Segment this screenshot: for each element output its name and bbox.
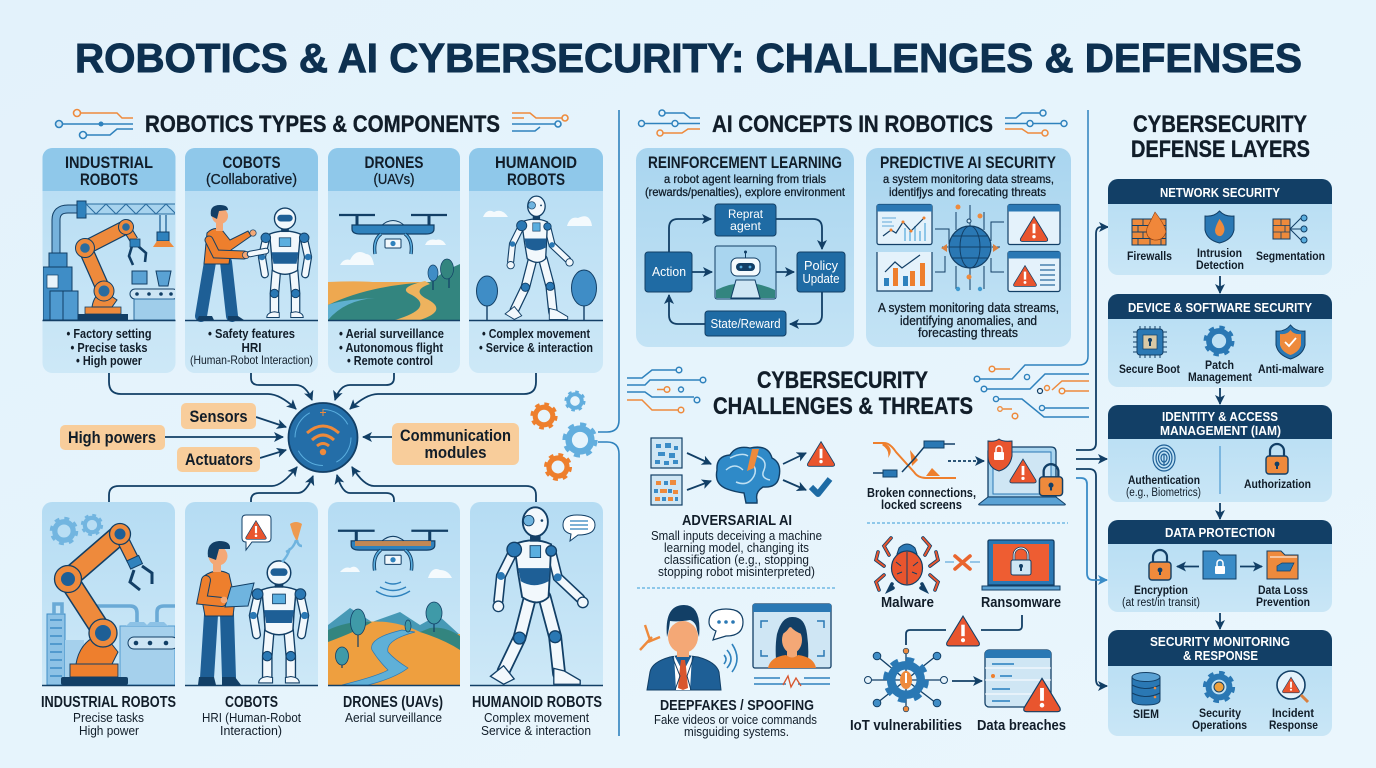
arrows between layers [1219,276,1221,629]
icon: operations gear [1205,673,1233,701]
label: communication modules [392,423,519,465]
description lower [878,301,1059,340]
caption: HRI (Human-Robot [202,710,301,725]
ground line [185,320,318,322]
heading: DEVICE & SOFTWARE SECURITY [1128,300,1312,315]
panel: reinforcement learning [636,148,854,347]
ground line [328,320,460,322]
icon: fingerprint [1153,445,1175,471]
label: Incident [1272,706,1314,720]
heading: & RESPONSE [1183,648,1258,663]
label: actuators [177,447,260,472]
bullet text: (Human-Robot Interaction) [190,353,313,367]
box: repeat agent [715,204,776,236]
icon: warning [807,442,835,466]
section: cybersecurity threats [627,110,1108,739]
panel: industrial robots [42,148,178,373]
arrow [952,680,982,682]
panel: cobots [185,148,318,373]
icon: gears [532,392,595,479]
chart window: bars [877,252,932,291]
description: Fake videos or voice commands [654,713,817,727]
heading: ROBOTS [507,170,565,189]
bullet text: • Autonomous flight [339,341,444,355]
icon: sound waves [724,644,737,672]
threat: broken connections [867,439,1065,512]
alert window 2 [1008,252,1060,292]
heading [495,153,577,189]
icon: blue folder [1203,551,1236,579]
threat: malware [876,538,1061,611]
labels: IoT vulnerabilities [850,718,962,734]
icon: circuit right with riser [974,110,1089,419]
label [867,485,976,512]
heading: IDENTITY & ACCESS [1162,409,1278,424]
labels: Data breaches [977,718,1066,734]
label [1122,583,1200,609]
panel: data protection [1108,520,1332,612]
description: learning model, changing its [664,541,809,555]
label: Broken connections, [867,485,976,500]
label: high powers [60,425,165,450]
bullet text: • Service & interaction [479,341,593,355]
label: Detection [1196,258,1244,272]
icon: orange spark [640,625,660,650]
label [1192,706,1247,732]
heading: SECURITY MONITORING [1150,634,1290,649]
panel: identity and access management [1108,405,1332,502]
icon: speech bubble [709,609,743,640]
label: Response [1269,718,1318,732]
labels [850,718,1066,734]
heading: DRONES [364,153,424,172]
box: policy update [797,252,845,292]
icon: database [1132,672,1160,705]
box: state reward: State/Reward [710,317,781,331]
ground line [470,684,603,686]
description: Small inputs deceiving a machine [651,529,822,543]
icon: broken cables [873,441,956,478]
bullet text: • Precise tasks [70,341,148,355]
heading: INDUSTRIAL [65,153,153,172]
label: communication modules: modules [424,443,486,462]
caption: INDUSTRIAL ROBOTS [41,694,176,711]
label: Prevention [1256,595,1310,609]
box: repeat agent: Reprat [728,207,764,221]
heading: ROBOTS [80,170,138,189]
bullet text: • Remote control [347,354,433,368]
panel: drones lower [328,502,460,725]
vertical section divider [598,110,619,736]
icon: suited person [647,605,721,690]
bullet text: • Safety features [208,327,295,341]
box: action: Action [652,265,686,279]
heading: COBOTS [222,153,280,172]
icon: patch gear [1206,328,1232,354]
illustration: drone over landscape [328,215,460,320]
label: (e.g., Biometrics) [1126,487,1201,499]
label: Management [1188,370,1252,384]
icon: orange folder [1267,551,1298,579]
icon: circuit left [56,110,133,138]
box: robot agent [715,246,776,299]
heading: defense layers [1131,111,1310,163]
hub: wifi core [288,403,358,472]
threat: IoT vulnerabilities [850,648,1066,734]
arrows [1177,566,1262,568]
heading: (UAVs) [374,171,414,188]
icon: ransomware laptop [982,540,1060,590]
caption [202,694,301,738]
box: action [645,252,692,292]
arrows [687,453,806,490]
heading [65,153,153,189]
label: Firewalls [1127,249,1172,263]
caption [472,694,602,738]
panel: industrial robots lower [41,502,178,738]
caption: Aerial surveillance [345,710,442,725]
illustration: person with tablet and robot [198,515,308,685]
panel: humanoid lower [470,502,603,738]
panel: network security [1108,179,1332,275]
label: Intrusion [1197,246,1242,260]
caption: COBOTS [225,694,278,711]
label: actuators: Actuators [185,451,253,469]
icon: check [811,479,830,494]
illustration: factory arm [43,201,178,320]
label: locked screens [881,497,962,512]
heading: AI concepts: AI CONCEPTS IN ROBOTICS [712,111,993,138]
icon: anti-malware shield [1276,325,1305,359]
title: ROBOTICS & AI CYBERSECURITY: CHALLENGES & DEFENSES [75,35,1302,81]
labels: Ransomware [981,595,1061,611]
label: Secure Boot [1119,362,1180,376]
label: SIEM [1133,707,1159,721]
description [654,713,817,739]
label: DEEPFAKES / SPOOFING [660,697,814,714]
heading: DATA PROTECTION [1165,525,1275,540]
chart window: line [877,204,932,244]
icon: cross [945,556,980,569]
input images [651,438,682,505]
description: misguiding systems. [684,725,789,739]
bullet text [339,327,444,368]
icon: circuit left [627,367,706,413]
heading: robotics types: ROBOTICS TYPES & COMPONENTS [145,111,500,138]
panel: device and software security [1108,294,1332,387]
divider [1219,446,1221,494]
alert window 1 [1008,204,1060,244]
box: policy update: Update [802,272,840,286]
box: repeat agent: agent [730,219,762,233]
bullet text: • Complex movement [482,327,591,341]
label: Operations [1192,718,1247,732]
heading: PREDICTIVE AI SECURITY [880,153,1057,172]
caption: Interaction) [220,723,282,738]
description: stopping robot misinterpreted) [658,565,815,579]
ground line [42,684,175,686]
threat: deepfakes and spoofing [640,604,831,739]
illustration: walking humanoid [476,196,596,320]
connectors to defense layers [1076,227,1108,686]
description lower: forecasting threats [918,326,1018,340]
labels: Malware [881,595,934,611]
panel: humanoid robots [469,148,603,373]
bullet text: • Factory setting [66,327,152,341]
icon: database window [985,650,1060,712]
threat: adversarial AI [651,438,835,579]
icon: firewall [1132,212,1166,245]
label [1269,706,1318,732]
icon: waveform [754,676,830,687]
label: ADVERSARIAL AI [682,512,792,529]
label: (at rest/in transit) [1122,597,1200,609]
label: Encryption [1134,583,1188,597]
dashed divider [867,522,1068,524]
icon: chip [1133,326,1167,358]
label: communication modules: Communication [400,426,511,445]
panel: security monitoring and response [1108,630,1332,736]
heading: challenges and threats: CYBERSECURITY [757,367,928,394]
description: classification (e.g., stopping [664,553,809,567]
bullet text [190,327,313,367]
description lower: A system monitoring data streams, [878,301,1059,315]
label: sensors: Sensors [190,408,248,426]
bullet text: • Aerial surveillance [339,327,444,341]
section: robotics types and components [41,110,603,738]
heading [1160,409,1281,438]
description [645,172,846,199]
label: Patch [1205,358,1234,372]
heading: HUMANOID [495,153,577,172]
label: sensors [181,403,256,429]
heading [206,153,297,188]
heading [1150,634,1290,663]
box: policy update: Policy [804,259,839,273]
label: high powers: High powers [68,428,156,447]
description [651,529,822,579]
ground line [42,320,176,322]
ground line [469,320,603,322]
illustration: large walking humanoid [490,507,595,684]
icon: circuit right [512,113,568,131]
ground line [185,684,318,686]
bullet text: • High power [76,354,142,368]
box: state reward [705,311,786,336]
caption: DRONES (UAVs) [343,694,443,711]
heading [364,153,424,188]
heading: MANAGEMENT (IAM) [1160,423,1281,438]
icon: bug [876,538,938,590]
dashed divider [637,587,836,589]
icon: circuit left [638,110,700,136]
connector: warning [906,615,1022,646]
heading: defense layers: DEFENSE LAYERS [1131,136,1310,163]
heading: defense layers: CYBERSECURITY [1133,111,1307,138]
label: Segmentation [1256,249,1325,263]
loop arrows [669,219,822,324]
heading: REINFORCEMENT LEARNING [648,153,842,172]
bullet text [479,327,593,355]
caption: Precise tasks [73,710,144,725]
illustration: drone, hills, river [328,531,460,685]
description: identifjys and forecating threats [889,185,1046,199]
icon: lock [1149,550,1171,580]
panel: drones [328,148,460,373]
section: AI concepts [636,110,1071,347]
ground line [328,684,460,686]
heading: challenges and threats: CHALLENGES & THREATS [713,393,973,420]
label: Anti-malware [1258,362,1324,376]
heading: (Collaborative) [206,171,297,188]
label [1256,583,1310,609]
icon: incident magnifier [1277,671,1308,702]
icon: IoT gear [864,648,948,712]
heading: challenges and threats [713,367,973,420]
icon: lock [1266,444,1288,474]
icon: brain [716,447,780,503]
caption: Complex movement [484,710,589,725]
label: Security [1199,706,1241,720]
label [1126,473,1201,499]
globe network [935,204,1004,291]
heading: NETWORK SECURITY [1160,185,1280,200]
label [1188,358,1252,384]
caption: Service & interaction [481,723,591,738]
labels [881,595,1061,611]
label: Data Loss [1258,583,1308,597]
caption: HUMANOID ROBOTS [472,694,602,711]
caption [41,694,176,738]
description lower: identifying anomalies, and [900,314,1037,328]
panel: predictive AI security [866,148,1071,347]
description: a robot agent learning from trials [664,172,826,186]
description: a system monitoring data streams, [883,172,1054,186]
illustration: person and robot handshake [197,205,311,320]
icon: circuit right [1005,110,1067,136]
connector arrows into hub [109,373,536,502]
bullet text [66,327,152,368]
label [1196,246,1244,272]
description [883,172,1054,199]
label: Authentication [1128,473,1200,487]
icon: laptop with lock [979,439,1065,505]
section: defense layers [1108,111,1332,736]
label: Authorization [1244,477,1311,491]
illustration: large arm [47,515,178,685]
description: (rewards/penalties), explore environment [645,185,846,199]
caption [343,694,443,725]
icon: intrusion shield [1205,211,1234,243]
bullet text: HRI [242,341,262,355]
icon: segmentation [1273,215,1307,243]
panel: cobots lower [185,502,318,738]
arrow dashed [948,460,984,462]
caption: High power [79,723,140,738]
icon: video window [753,604,831,668]
